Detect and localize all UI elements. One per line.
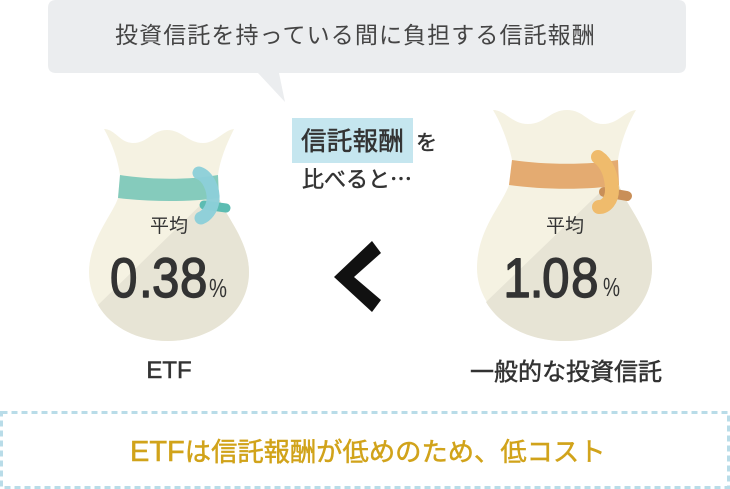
value: 1.08%: 1.08 (503, 247, 599, 310)
speech bubble (48, 0, 686, 102)
comparison arrow (334, 241, 381, 312)
label: 平均: 平均 (546, 211, 584, 238)
value: 0.38%: 0.38 (110, 247, 207, 310)
label: general investment trust: 一般的な投資信託 (470, 352, 662, 387)
label: ETF: ETF (146, 357, 192, 384)
belt (118, 175, 219, 201)
text: を: を (416, 127, 437, 157)
conclusion box: ETFは信託報酬が低めのため、低コスト (130, 430, 606, 469)
speech bubble text: 投資信託を持っている間に負担する信託報酬 (115, 16, 596, 50)
money bag: ETF: % (209, 273, 227, 303)
conclusion box (2, 412, 728, 488)
money bag: investment trust: % (603, 272, 620, 302)
money bag: ETF (89, 129, 249, 341)
money bag: investment trust (477, 110, 652, 341)
highlighted term: 信託報酬 (301, 121, 404, 158)
belt (509, 160, 619, 189)
text: compare: 比べると… (302, 162, 412, 194)
label: 平均: 平均 (150, 211, 188, 238)
